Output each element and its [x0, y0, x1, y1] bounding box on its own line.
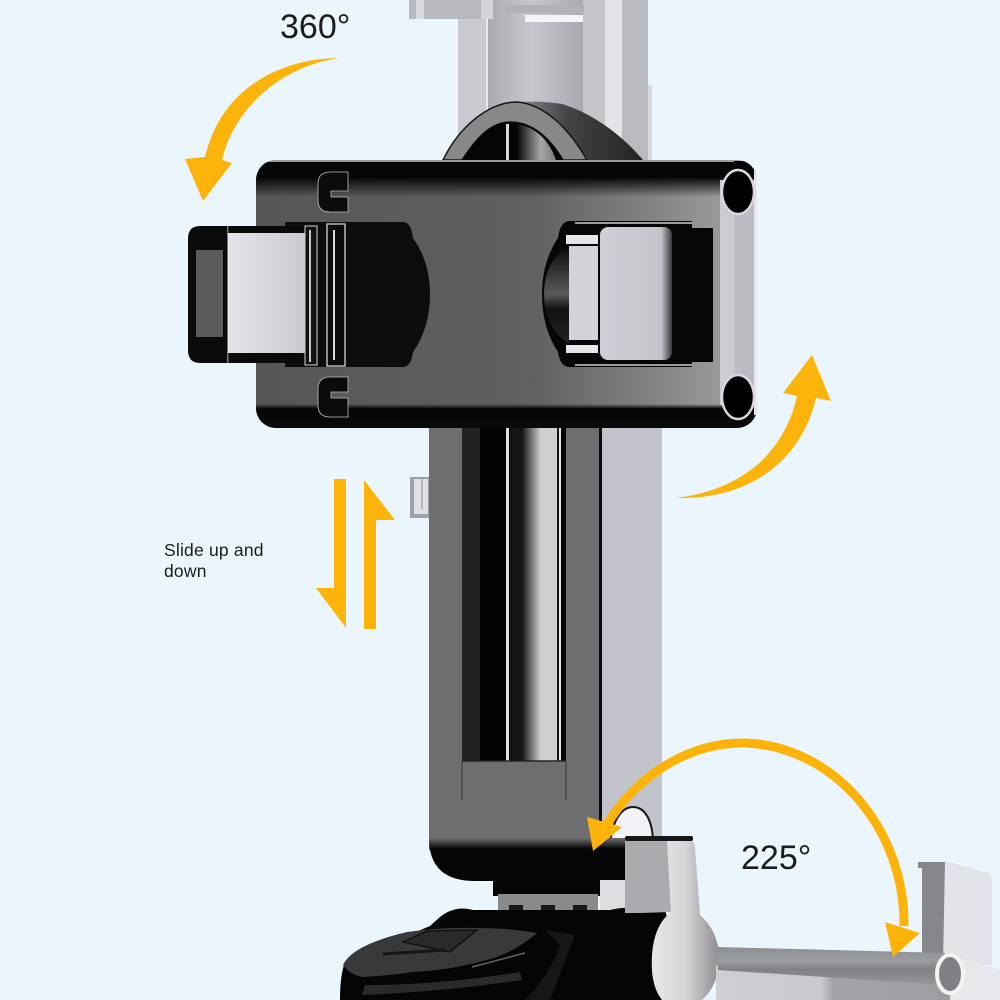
arm upright: [918, 862, 946, 955]
bottom screw hole: [722, 375, 754, 419]
arrow: 225 degree hinge: [587, 743, 920, 957]
label: 225 degrees: 225°: [741, 839, 811, 877]
fastening studs: [509, 905, 587, 913]
rotation ring: [443, 102, 643, 160]
text: slide up and down: Slide up and: [164, 540, 264, 560]
right phone clip: [566, 222, 693, 366]
bottom left slot: [318, 377, 348, 417]
main black plate: [256, 160, 758, 428]
hinge loop: [610, 807, 653, 845]
base mount: [340, 878, 690, 1000]
left phone clip: [188, 224, 345, 366]
lower black column: [429, 425, 602, 850]
white panel: [943, 861, 992, 965]
arrow: tilt right: [675, 355, 831, 498]
right recess: [542, 221, 713, 367]
slide channel: [462, 428, 566, 761]
arm underside: [716, 965, 950, 1000]
top screw hole: [722, 170, 754, 214]
arm tube: [717, 947, 945, 985]
arrow: 360 degree rotation: [185, 58, 340, 201]
lever: [625, 836, 719, 1000]
left recess: [285, 222, 430, 367]
text: slide up and down: down: [164, 561, 207, 581]
heading: 360 degrees: 360°: [280, 8, 350, 46]
folded arm: [716, 861, 1000, 1000]
arrow: slide up: [364, 480, 395, 629]
lower silver rail: [410, 425, 662, 845]
upper silver rail: [409, 0, 652, 165]
arrow: slide down: [316, 479, 346, 628]
right dome highlight: [544, 244, 569, 344]
column foot: [429, 838, 628, 881]
top left slot: [318, 172, 348, 212]
